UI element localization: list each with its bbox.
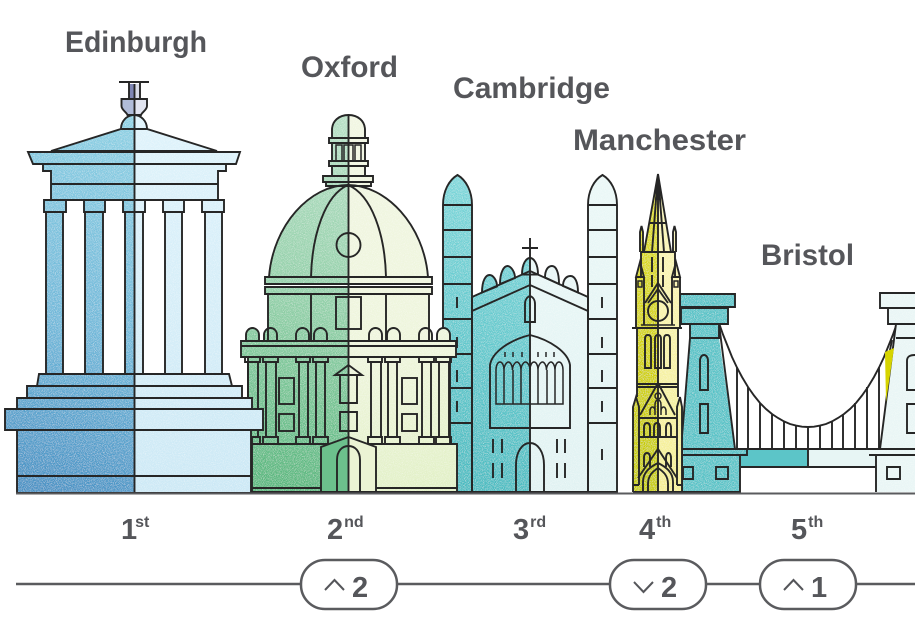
badge: down 2 <box>610 560 706 609</box>
building: Oxford Radcliffe Camera <box>241 115 458 492</box>
title: Bristol: Bristol <box>761 239 854 272</box>
rank: 3rd: 3 <box>513 514 529 546</box>
rank: 5th: th <box>808 514 823 531</box>
rank: 3rd: rd <box>530 514 546 531</box>
rank: 5th: 5 <box>791 514 807 546</box>
rank: 1st: 1 <box>121 514 137 546</box>
bridge deck <box>741 449 876 467</box>
right tower <box>869 293 915 492</box>
rank: 1st: st <box>135 514 150 531</box>
title: Oxford: Oxford <box>301 51 398 84</box>
spire <box>640 174 676 252</box>
rank: 2nd: 2 <box>327 514 343 546</box>
badge: down 2: 2 <box>661 572 677 604</box>
title: Manchester: Manchester <box>573 124 746 157</box>
bridge cable and hangers <box>719 323 897 449</box>
left tower <box>680 294 747 492</box>
ground line <box>16 492 915 494</box>
urn finial <box>122 82 147 115</box>
badge: up 1: 1 <box>811 572 827 604</box>
badge: up 2 <box>301 560 397 609</box>
badge: up 1 <box>760 560 856 609</box>
change timeline <box>16 583 915 585</box>
building: Manchester town hall tower <box>632 174 682 492</box>
building: Cambridge chapel <box>443 175 617 492</box>
title: Cambridge: Cambridge <box>453 72 610 105</box>
badge: up 2: 2 <box>352 572 368 604</box>
rank: 2nd: nd <box>344 514 364 531</box>
rank: 4th: 4 <box>639 514 655 546</box>
building: Edinburgh monument <box>5 82 263 493</box>
rank: 4th: th <box>656 514 671 531</box>
building: Bristol suspension bridge <box>680 293 915 492</box>
title: Edinburgh: Edinburgh <box>65 26 207 59</box>
yellow sliver <box>885 348 894 402</box>
